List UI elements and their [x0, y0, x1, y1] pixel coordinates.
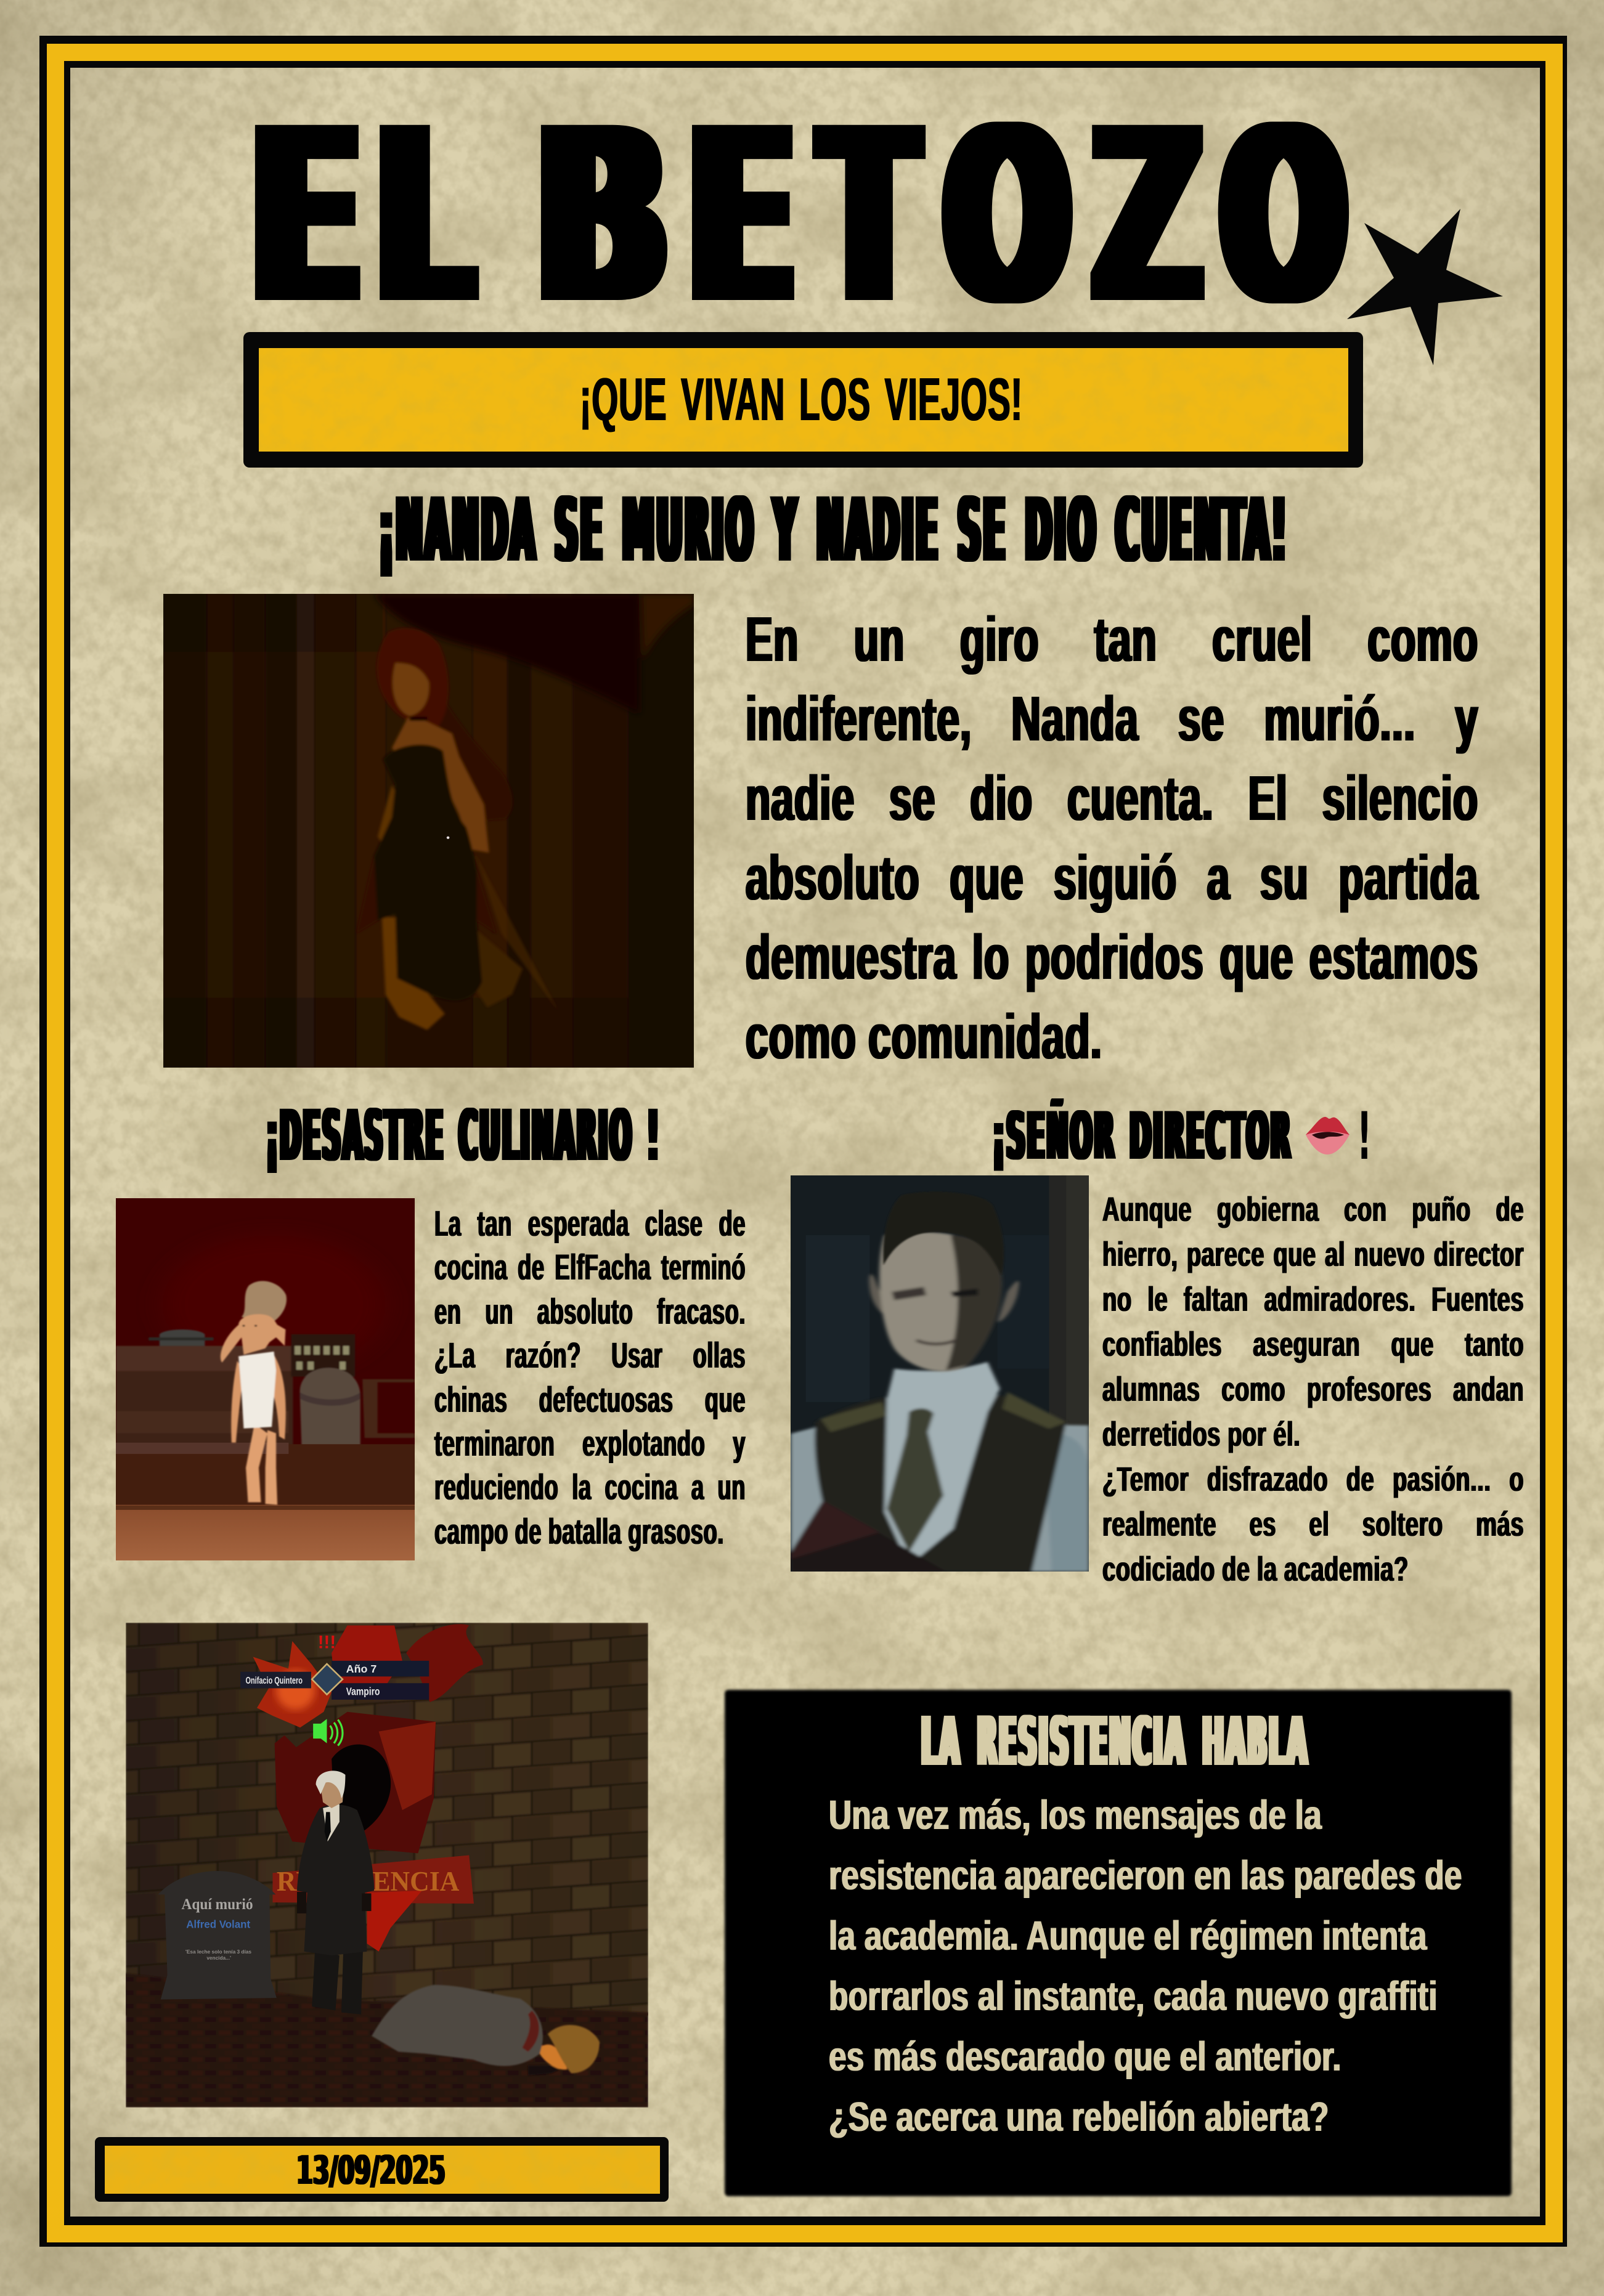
- article text: nuevo director: alumnas como profesores andan: [1102, 1369, 1524, 1408]
- man in black coat: [297, 1771, 374, 2014]
- photo: elf chef in kitchen: [116, 1198, 415, 1560]
- floor: [116, 1444, 415, 1507]
- main article text: demuestra lo podridos que estamos: [746, 922, 1478, 992]
- photo: school director portrait: [791, 1175, 1089, 1572]
- tagline banner: [243, 332, 1363, 468]
- article text: clase de cocina: en un absoluto fracaso.: [434, 1292, 746, 1332]
- shirt and vest: [791, 1362, 1089, 1572]
- article text: nuevo director: derretidos por él.: [1102, 1414, 1300, 1453]
- article text: nuevo director: [1102, 1187, 1524, 1605]
- title: El Betozo: O: [1222, 77, 1345, 357]
- date banner: [95, 2137, 669, 2202]
- main article text: [746, 599, 1478, 1086]
- title: El Betozo: E: [689, 77, 794, 357]
- article text: nuevo director: hierro, parece que al nuevo director: [1102, 1235, 1524, 1273]
- title: El Betozo: L: [377, 77, 472, 357]
- counter and pot: [116, 1329, 293, 1446]
- article text: nuevo director: no le faltan admiradores. Fuentes: [1102, 1280, 1524, 1318]
- article text: nuevo director: confiables aseguran que tanto: [1102, 1324, 1524, 1363]
- article text: nuevo director: Aunque gobierna con puño de: [1102, 1190, 1524, 1228]
- head: [869, 1232, 1019, 1371]
- icon: black star: [1347, 209, 1503, 365]
- main article text: indiferente, Nanda se murió... y: [746, 683, 1478, 754]
- tombstone: Aquí murió: [182, 1895, 253, 1913]
- article text: clase de cocina: ¿La razón? Usar ollas: [434, 1336, 746, 1376]
- player tag: Año 7: [346, 1663, 377, 1675]
- icon: lips: [1306, 1116, 1350, 1154]
- main article text: En un giro tan cruel como: [746, 604, 1478, 675]
- photo: Nanda in the dark: [163, 594, 694, 1068]
- main article text: nadie se dio cuenta. El silencio: [746, 763, 1478, 834]
- banner box: [243, 332, 1363, 468]
- panel text: resistencia aparecieron en las paredes de: [829, 1852, 1462, 1899]
- tombstone: 'Esa leche solo tenía 3 días: [185, 1949, 251, 1955]
- panel text: borrarlos al instante, cada nuevo graffiti: [829, 1973, 1438, 2019]
- top right shadow and arch: [374, 594, 694, 715]
- photo: resistance graffiti and tombstone: [126, 1623, 648, 2107]
- heading: desastre culinario: ¡DESASTRE CULINARIO !: [266, 1095, 661, 1177]
- exclamation mark: !: [1357, 1098, 1372, 1174]
- spice rack and barrel: [291, 1334, 415, 1464]
- tombstone: Alfred Volant: [186, 1918, 250, 1931]
- tombstone: [158, 1871, 277, 2000]
- article text: clase de cocina: chinas defectuosas que: [434, 1380, 746, 1420]
- main article text: como comunidad.: [746, 1001, 1102, 1072]
- panel background: [717, 1682, 1519, 2204]
- title: El Betozo: O: [945, 77, 1069, 357]
- article text: clase de cocina: campo de batalla grasoso.: [434, 1512, 724, 1552]
- banner box: [95, 2137, 669, 2202]
- panel text: la academia. Aunque el régimen intenta: [829, 1913, 1427, 1959]
- article text: clase de cocina: cocina de ElfFacha terminó: [434, 1247, 746, 1288]
- main article text: absoluto que siguió a su partida: [746, 842, 1478, 913]
- resistance emblem: RESISTENCIA: [277, 1865, 459, 1897]
- date text: 13/09/2025: [296, 2148, 446, 2194]
- player tag: [240, 1632, 429, 1700]
- panel text: Una vez más, los mensajes de la: [829, 1792, 1322, 1838]
- player tag: Onifacio Quintero: [245, 1676, 303, 1686]
- article text: clase de cocina: La tan esperada clase de: [434, 1204, 746, 1244]
- title: El Betozo: B: [536, 77, 669, 357]
- character: [356, 628, 558, 1030]
- hair: [883, 1192, 1004, 1275]
- lying person: [372, 1985, 600, 2075]
- article text: clase de cocina: terminaron explotando y: [434, 1424, 746, 1464]
- resistance emblem: [253, 1624, 483, 1952]
- title: El Betozo: [251, 77, 1350, 357]
- article text: clase de cocina: [434, 1202, 746, 1572]
- tagline text: ¡QUE VIVAN LOS VIEJOS!: [580, 365, 1023, 433]
- icon: green speaker: [313, 1719, 343, 1746]
- title: El Betozo: T: [823, 77, 915, 357]
- article text: nuevo director: ¿Temor disfrazado de pasión... o: [1102, 1459, 1524, 1498]
- panel text: es más descarado que el anterior.: [829, 2034, 1341, 2080]
- panel: la resistencia habla: [725, 1690, 1512, 2196]
- heading: senor director: [990, 1100, 1372, 1170]
- elf chef figure: [221, 1281, 287, 1505]
- panel text: ¿Se acerca una rebelión abierta?: [829, 2094, 1329, 2140]
- wooden planks: [163, 594, 694, 1068]
- main headline: ¡NANDA SE MURIO Y NADIE SE DIO CUENTA!: [379, 479, 1288, 582]
- title: El Betozo: Z: [1095, 77, 1200, 357]
- panel text: [829, 1785, 1482, 2155]
- cobblestone ground: [126, 1973, 648, 2107]
- article text: nuevo director: codiciado de la academia?: [1102, 1549, 1409, 1588]
- tombstone: vencida...': [206, 1955, 231, 1961]
- article text: clase de cocina: reduciendo la cocina a un: [434, 1467, 746, 1507]
- article text: nuevo director: realmente es el soltero más: [1102, 1504, 1524, 1543]
- title: El Betozo: E: [251, 77, 361, 357]
- panel heading: LA RESISTENCIA HABLA: [921, 1702, 1309, 1781]
- player tag: !!!: [318, 1632, 336, 1652]
- player tag: Vampiro: [346, 1685, 380, 1697]
- heading text: ¡SEÑOR DIRECTOR: [993, 1098, 1292, 1174]
